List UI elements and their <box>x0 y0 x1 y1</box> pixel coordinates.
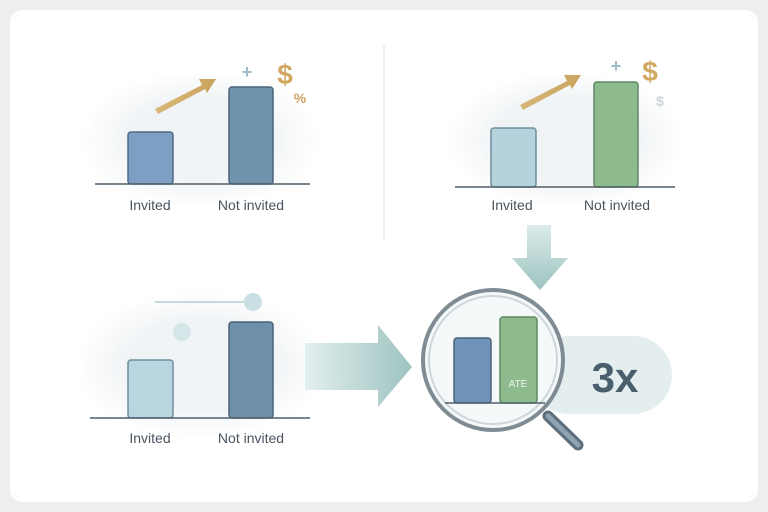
panel: bottom-left chart: Not invited <box>218 430 284 446</box>
panel: top-left chart: Not invited <box>218 197 284 213</box>
panel: top-left chart: $ <box>277 59 293 90</box>
panel: top-right chart: $ <box>656 93 664 109</box>
panel: top-right chart: $ <box>642 56 658 87</box>
panel: top-right chart <box>445 56 685 213</box>
arrow: down <box>512 225 568 290</box>
panel: top-right chart: Invited <box>491 197 533 213</box>
panel: top-left chart: + <box>242 62 252 82</box>
arrow: right <box>305 325 412 407</box>
divider <box>383 45 385 240</box>
panel: top-left chart: % <box>294 90 307 106</box>
panel: bottom-left chart: Invited <box>129 430 171 446</box>
icon: magnifier with ATE chart: ATE <box>509 379 528 390</box>
panel: bottom-left chart <box>75 290 325 446</box>
icon: magnifier with ATE chart <box>423 290 578 445</box>
panel: top-right chart: + <box>611 56 621 76</box>
callout: 3x pill: 3x <box>592 354 639 401</box>
callout: 3x pill <box>530 336 672 414</box>
panel: top-right chart: Not invited <box>584 197 650 213</box>
panel: top-left chart: Invited <box>129 197 171 213</box>
panel: top-left chart <box>80 59 320 213</box>
